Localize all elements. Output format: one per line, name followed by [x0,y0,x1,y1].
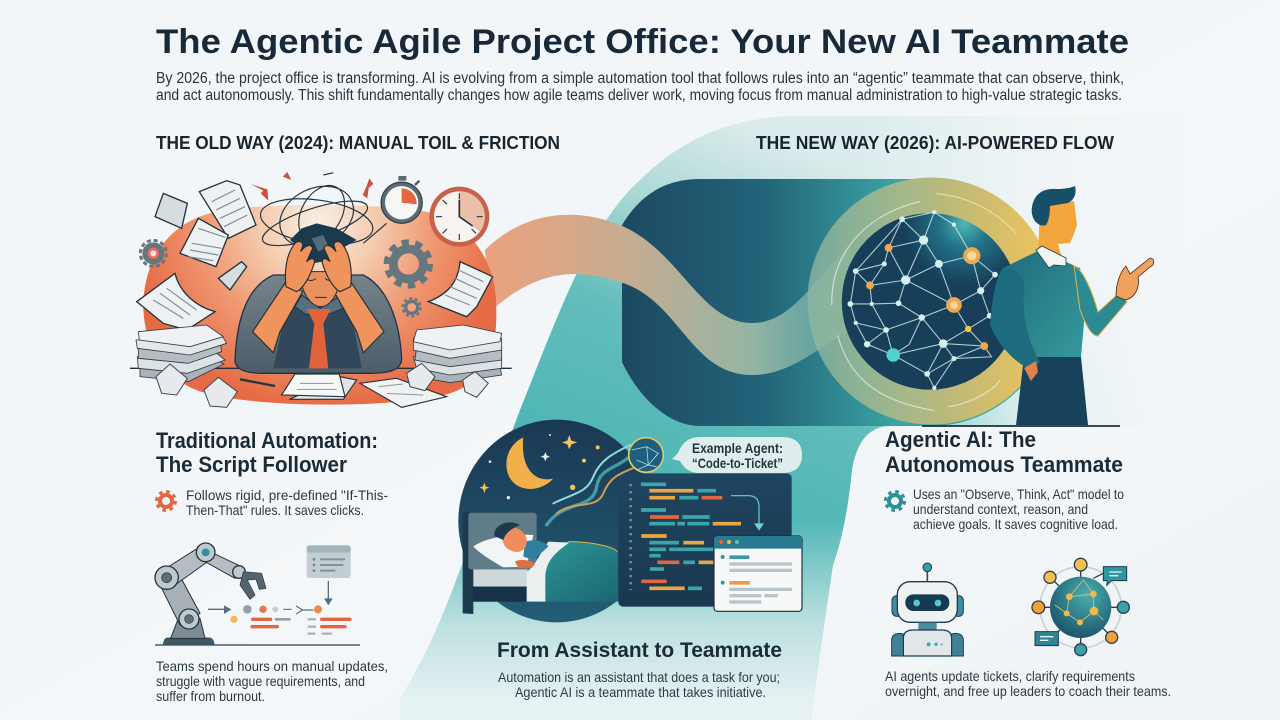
illustration: neural network globe [832,194,1018,410]
stars [479,435,600,493]
bed [463,512,618,614]
hands on head [285,242,351,292]
pointing hand [1116,258,1154,300]
wall clock [429,187,489,247]
heading: the old way: THE OLD WAY (2024): MANUAL TOIL & FRICTION [156,133,560,153]
text: agentic AI description: achieve goals. It saves cognitive load. [913,516,1118,532]
teal flowing background shape [400,116,1102,720]
right paper stack [413,325,502,383]
raised arm [1074,266,1127,336]
glow ring around globe [828,198,1034,404]
flying papers [137,181,493,330]
hair [290,223,357,270]
hanging arm [990,268,1040,370]
large gear [387,242,430,286]
text: old way impact: struggle with vague requirements, and [156,673,365,689]
flow ribbon from old way to new way [485,215,862,375]
forearms [253,282,384,353]
mini globe [629,438,663,472]
text: new way impact: overnight, and free up leaders to coach their teams. [885,683,1171,699]
worker torso [235,275,402,373]
orbit arcs [832,194,1016,410]
moon [506,437,553,489]
text: assistant versus teammate: Automation is an assistant that does a task for you; [498,669,780,685]
text: traditional automation description [186,487,388,518]
stopwatch [381,176,422,223]
title: The Agentic Agile Project Office: Your New AI Teammate [156,23,1129,61]
dark code panel [618,473,792,607]
left paper stack [136,325,227,382]
lower hand [1024,361,1038,381]
icon: robot [892,563,963,656]
arrow from code to ticket [731,496,764,531]
head [301,272,340,307]
left gear [140,240,166,266]
neck and face [1038,201,1077,258]
text: old way impact: Teams spend hours on manual updates, [156,658,388,674]
collar [1036,246,1066,268]
intro text block: By 2026, the project office is transforming. AI is evolving from a simple automation tool that follows rules into an “agentic” teammate that can observe, think, [156,70,1124,87]
hair [1032,186,1076,226]
text: old way impact [156,658,388,704]
heading: traditional automation [156,428,378,477]
text: assistant versus teammate: Agentic AI is a teammate that takes initiative. [515,684,766,700]
heading: the new way: THE NEW WAY (2026): AI-POWERED FLOW [756,133,1114,153]
scribbled stress lines [258,173,387,259]
callout: example agent: Example Agent: [692,440,783,456]
sleeper [523,540,548,560]
dark teal capsule [622,179,1054,426]
small gear [403,298,421,316]
network edges [850,212,995,388]
text: traditional automation description: Follows rigid, pre-defined "If-This- [186,487,388,503]
pillow [473,535,533,567]
text: assistant versus teammate [498,669,780,700]
heading: from assistant to teammate: From Assistant to Teammate [497,638,782,662]
text: traditional automation description: Then-That" rules. It saves clicks. [186,502,364,518]
text: agentic AI description [913,486,1124,532]
callout: example agent: “Code-to-Ticket” [692,455,783,471]
desk line [130,366,512,370]
orange burst behind worker [143,205,496,405]
text: old way impact: suffer from burnout. [156,688,265,704]
heading: agentic AI: Agentic AI: The [885,427,1036,452]
flowing data stream [547,445,637,525]
intro text block: and act autonomously. This shift fundamentally changes how agile teams deliver work, moving focus from manual administration to high-value strategic tasks. [156,87,1122,104]
desk papers and pen [240,374,447,407]
ground line [922,425,1120,427]
heading: traditional automation: The Script Follower [156,452,347,477]
text: agentic AI description: Uses an "Observe, Think, Act" model to [913,486,1124,502]
text: new way impact: AI agents update tickets, clarify requirements [885,668,1135,684]
trousers [1016,357,1088,425]
blanket [527,542,618,602]
text: agentic AI description: understand context, reason, and [913,501,1088,517]
tie [307,309,331,368]
illustration: overnight code-to-ticket agent [458,420,802,622]
code lines [641,484,741,588]
callout: example agent [672,437,802,473]
stress sparks [251,172,373,201]
text: new way impact [885,668,1171,699]
night sky circle [458,420,655,622]
icon: teal gear [886,492,904,510]
ticket window [714,536,802,611]
icon: orange gear [156,492,176,510]
illustration: new-way teammate [990,186,1154,425]
illustration: robot arm [155,543,360,645]
icon: connected agent globe [1032,558,1129,656]
code gutter dots [627,484,635,590]
crumpled paper balls [156,363,488,407]
illustration: stressed worker [130,172,512,407]
intro text block [156,70,1124,104]
network nodes [847,210,998,390]
sweater torso [1003,250,1086,357]
heading: agentic AI: Autonomous Teammate [885,452,1123,477]
heading: traditional automation: Traditional Automation: [156,428,378,453]
heading: agentic AI [885,427,1123,477]
